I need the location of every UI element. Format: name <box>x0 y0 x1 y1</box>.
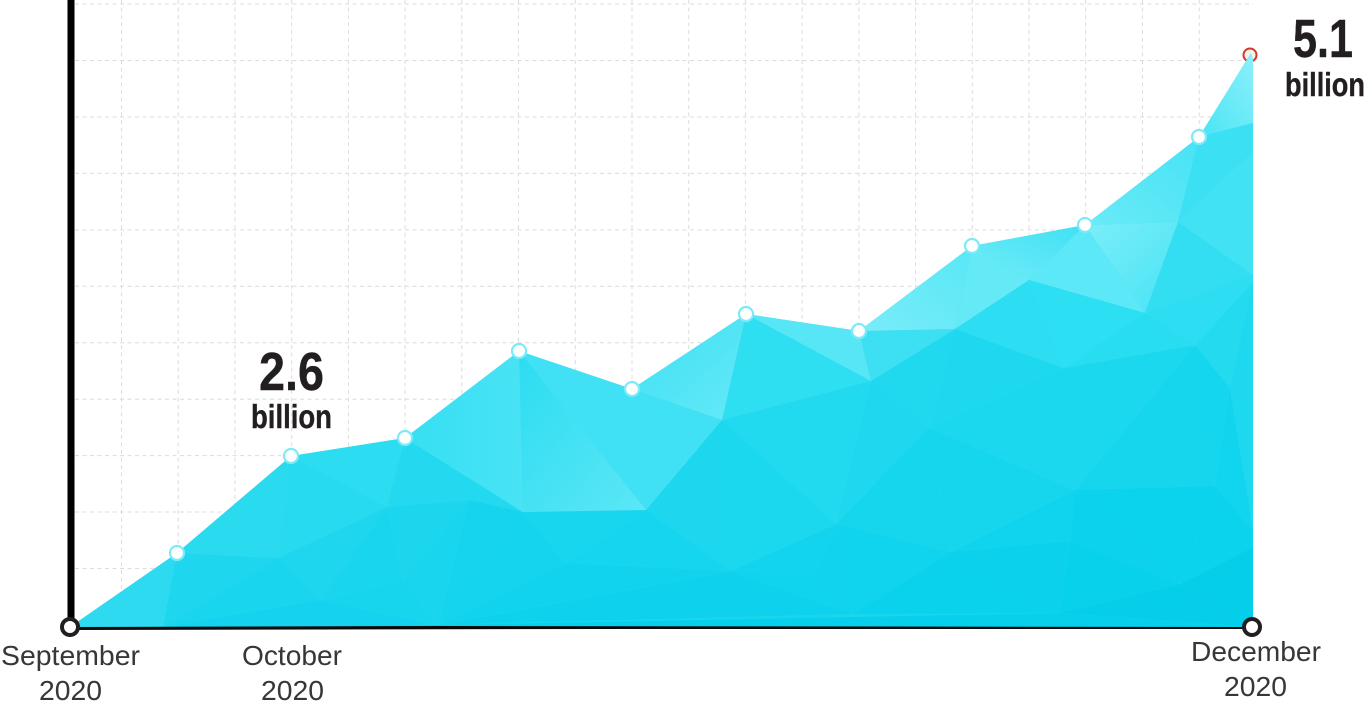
y axis <box>68 0 74 627</box>
grid lines <box>75 0 1253 627</box>
x axis <box>70 626 1250 630</box>
data point markers <box>170 130 1206 560</box>
x label: December 2020: 2020 <box>1224 671 1287 702</box>
x label: October 2020: October <box>242 640 342 671</box>
x label: October 2020: 2020 <box>261 675 324 706</box>
x label: September 2020 <box>1 640 140 706</box>
x label: December 2020 <box>1191 636 1321 702</box>
peak marker: red point <box>1244 48 1256 62</box>
low-poly facets: lower, softer band <box>70 282 1253 627</box>
callout: 2.6 billion: 2.6 <box>259 342 324 402</box>
callout: 2.6 billion <box>251 342 332 435</box>
x label: October 2020 <box>242 640 342 706</box>
x label: September 2020: September <box>1 640 140 671</box>
callout: 5.1 billion <box>1285 9 1365 103</box>
callout: 5.1 billion: 5.1 <box>1293 9 1353 69</box>
axis end marker <box>1244 619 1260 635</box>
axis origin marker <box>62 619 78 635</box>
callout: 2.6 billion: billion <box>251 398 332 435</box>
low-poly area base <box>70 53 1253 627</box>
low-poly facets: upper, bright band <box>405 53 1253 512</box>
x label: September 2020: 2020 <box>39 675 102 706</box>
x label: December 2020: December <box>1191 636 1321 667</box>
